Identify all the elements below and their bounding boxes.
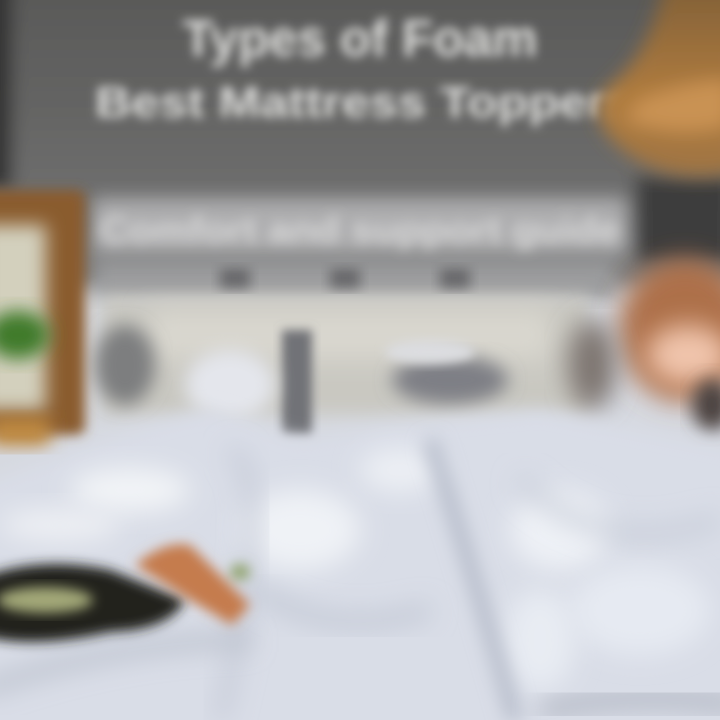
lamp	[598, 0, 720, 177]
subtitle bar	[92, 198, 627, 254]
orange bedside object	[568, 258, 720, 431]
white duvet	[0, 410, 720, 720]
headboard	[95, 262, 615, 435]
orange hand	[135, 544, 250, 625]
title: Types of Foam	[182, 10, 538, 68]
picture frame	[0, 190, 85, 446]
dark tray with green items	[0, 564, 185, 642]
subtitle bar: Comfort and support guide	[100, 209, 620, 250]
title	[95, 10, 635, 127]
title: Best Mattress Toppers	[95, 78, 635, 127]
